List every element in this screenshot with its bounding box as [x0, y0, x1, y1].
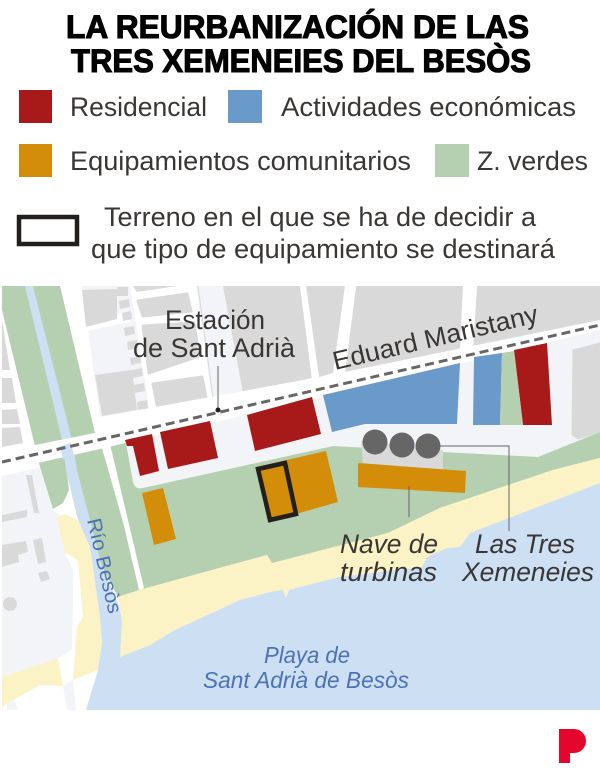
map [0, 286, 600, 710]
residential plots [125, 343, 552, 476]
label: Estación de Sant Adrià: Estación [165, 305, 265, 335]
logo [559, 729, 586, 763]
label: Las Tres Xemeneies: Xemeneies [461, 557, 594, 587]
label: Las Tres Xemeneies [461, 529, 594, 587]
roads [2, 286, 600, 590]
label: Estación de Sant Adrià: de Sant Adrià [133, 333, 295, 363]
legend: residencial [19, 90, 207, 123]
label: Eduard Maristany: Eduard Maristany [330, 299, 541, 376]
label: Playa de Sant Adrià de Besòs [203, 642, 409, 693]
legend: equipamientos comunitarios: Equipamientos comunitarios [70, 146, 411, 176]
gray block, east [572, 343, 600, 439]
service band [125, 325, 600, 488]
title [66, 9, 531, 79]
legend: zonas verdes [435, 144, 588, 177]
community facility plots [142, 451, 466, 545]
title: LA REURBANIZACIÓN DE LAS [66, 9, 529, 45]
beach, west [2, 514, 102, 708]
label: Río Besòs: Río Besòs [82, 516, 125, 616]
urban fabric, north of the railway [2, 286, 600, 447]
green strip between plots [500, 351, 523, 425]
undecided plot outline [258, 463, 296, 520]
legend: terreno por decidir: Terreno en el que se ha de decidir a [104, 202, 536, 232]
label: Nave de turbinas [340, 529, 438, 587]
beach, east [118, 458, 600, 657]
label: Nave de turbinas: Nave de [340, 529, 438, 559]
leader: Nave de turbinas [408, 486, 410, 517]
chimney base [361, 441, 443, 470]
economic activity plots [323, 353, 502, 432]
leader: Las Tres Xemeneies [440, 446, 509, 531]
legend: actividades económicas: Actividades económicas [281, 92, 576, 122]
green zones [2, 286, 600, 597]
leader: Estación [216, 366, 220, 412]
legend: residencial: Residencial [70, 92, 207, 122]
legend [19, 90, 588, 264]
label: Nave de turbinas: turbinas [340, 557, 437, 587]
label: Estación de Sant Adrià [133, 305, 295, 363]
label: Las Tres Xemeneies: Las Tres [475, 529, 575, 559]
sea [86, 483, 600, 710]
title: TRES XEMENEIES DEL BESÒS [71, 43, 531, 79]
label: Playa de Sant Adrià de Besòs: Sant Adrià de Besòs [203, 667, 409, 693]
three chimneys [362, 430, 440, 458]
legend: zonas verdes: Z. verdes [477, 146, 588, 176]
legend: terreno por decidir: que tipo de equipamiento se destinará [91, 234, 555, 264]
legend: terreno por decidir [19, 202, 555, 264]
river [25, 286, 123, 710]
urban fabric, west bank [2, 467, 76, 710]
railway line [2, 325, 600, 462]
label: Playa de Sant Adrià de Besòs: Playa de [264, 642, 350, 668]
